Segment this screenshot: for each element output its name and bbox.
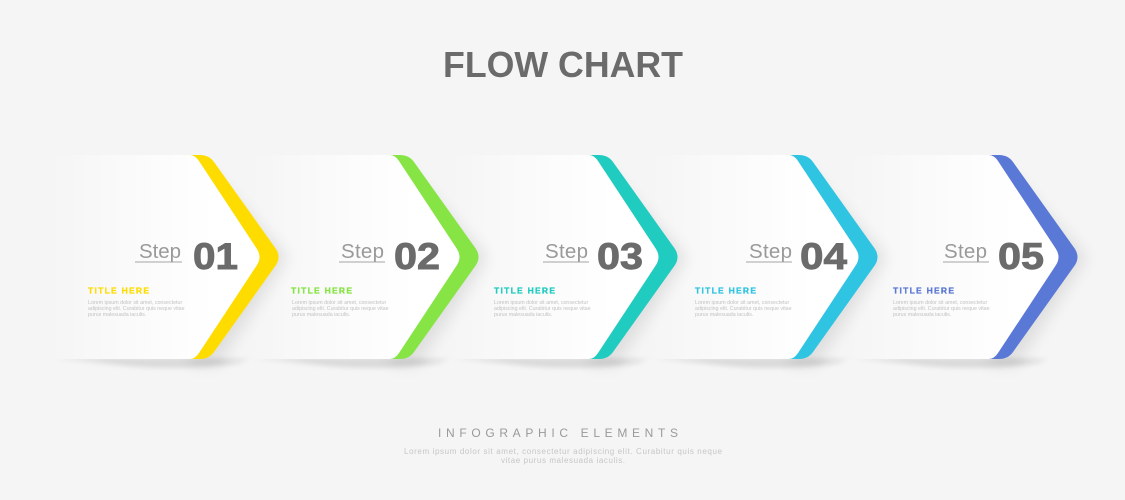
body text: step 05: adipiscing elit. Curabitur quis neque vitae (893, 306, 990, 312)
step 02 arrow (250, 155, 488, 368)
body text: step 02 (292, 300, 389, 318)
body text: step 05: Lorem ipsum dolor sit amet, consectetur (893, 300, 987, 306)
number: 05: 05 (998, 236, 1044, 277)
heading: step 05: TITLE HERE (893, 286, 954, 296)
white panel: step 05 (849, 155, 1058, 359)
heading: step 01: TITLE HERE (88, 286, 149, 296)
heading: step 03: TITLE HERE (494, 286, 555, 296)
arrow band: step 02 (388, 155, 478, 359)
step label: step 05: Step (944, 240, 987, 263)
body text: step 03: Lorem ipsum dolor sit amet, consectetur (494, 300, 588, 306)
body text: step 02: adipiscing elit. Curabitur quis neque vitae (292, 306, 389, 312)
body text: step 01 (88, 300, 185, 318)
number: 03: 03 (597, 236, 643, 277)
arrow band: step 01 (188, 155, 278, 359)
body text: step 02: Lorem ipsum dolor sit amet, consectetur (292, 300, 386, 306)
step 05 arrow (849, 155, 1087, 368)
arrow band: step 05 (987, 155, 1078, 359)
white panel: step 03 (449, 155, 658, 359)
footer text (404, 447, 723, 465)
step 04 arrow (649, 155, 887, 368)
number: 01: 01 (193, 236, 238, 277)
heading: step 02: TITLE HERE (291, 286, 352, 296)
step 03 arrow (449, 155, 687, 368)
body text: step 03 (494, 300, 591, 318)
body text: step 03: purus malesuada iaculis. (494, 312, 552, 318)
body text: step 05: purus malesuada iaculis. (893, 312, 951, 318)
body text: step 01: Lorem ipsum dolor sit amet, consectetur (88, 300, 182, 306)
footer text: Lorem ipsum dolor sit amet, consectetur adipiscing elit. Curabitur quis neque (404, 447, 723, 456)
white panel: step 02 (250, 155, 460, 359)
body text: step 04 (695, 300, 792, 318)
body text: step 01: purus malesuada iaculis. (88, 312, 146, 318)
body text: step 04: purus malesuada iaculis. (695, 312, 753, 318)
white panel: step 04 (649, 155, 858, 359)
body text: step 03: adipiscing elit. Curabitur quis neque vitae (494, 306, 591, 312)
arrow band: step 04 (787, 155, 878, 359)
body text: step 04: adipiscing elit. Curabitur quis neque vitae (695, 306, 792, 312)
step 01 arrow (50, 155, 288, 368)
arrow band: step 03 (587, 155, 678, 359)
step label: step 01: Step (139, 240, 181, 263)
body text: step 01: adipiscing elit. Curabitur quis neque vitae (88, 306, 185, 312)
step label: step 03: Step (545, 240, 588, 263)
body text: step 04: Lorem ipsum dolor sit amet, consectetur (695, 300, 789, 306)
body text: step 02: purus malesuada iaculis. (292, 312, 350, 318)
footer heading: INFOGRAPHIC ELEMENTS (438, 426, 678, 440)
footer text: vitae purus malesuada iaculis. (501, 456, 625, 465)
title: FLOW CHART (443, 44, 683, 85)
number: 02: 02 (394, 236, 440, 277)
white panel: step 01 (50, 155, 260, 359)
heading: step 04: TITLE HERE (695, 286, 756, 296)
step label: step 04: Step (749, 240, 792, 263)
step label: step 02: Step (341, 240, 384, 263)
body text: step 05 (893, 300, 990, 318)
number: 04: 04 (800, 236, 847, 277)
